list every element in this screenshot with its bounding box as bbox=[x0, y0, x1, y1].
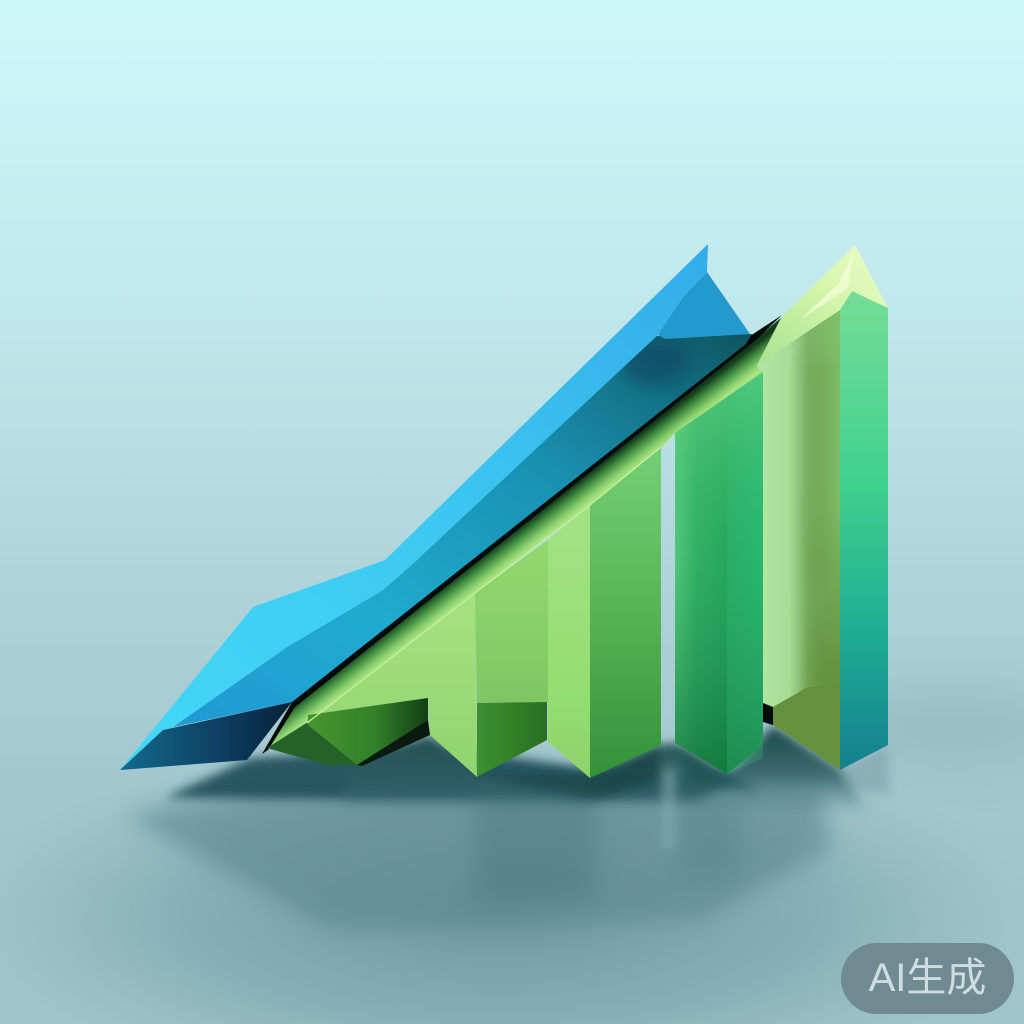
green top band bbox=[267, 317, 782, 749]
bar 4 roof bbox=[757, 245, 888, 365]
notch main facet bbox=[308, 698, 428, 765]
bar 2 light face bbox=[548, 505, 590, 778]
arrow navy underside bbox=[120, 702, 292, 770]
shade under arrow head bbox=[621, 338, 689, 386]
bar 1 front upper bbox=[475, 540, 548, 703]
bars top highlight edge bbox=[307, 447, 661, 723]
floor reflections and shadows bbox=[125, 725, 890, 930]
arrow mid-blue face bbox=[173, 295, 752, 727]
bar 4 right face bbox=[840, 291, 888, 770]
badge: AI生成: AI生成 bbox=[869, 956, 986, 1000]
notch left dark facet bbox=[267, 722, 357, 766]
bar 4 left face bbox=[757, 310, 840, 770]
badge: AI生成 bbox=[841, 943, 1014, 1014]
bar 3 bbox=[675, 372, 763, 774]
black line behind arrow bbox=[262, 315, 782, 754]
bar 2 front face bbox=[590, 447, 661, 778]
blue arrow bbox=[120, 244, 752, 770]
arrow head facet bbox=[658, 272, 750, 339]
bar 1 front lower dark bbox=[477, 702, 547, 777]
arrow top face bbox=[120, 244, 708, 770]
bar 1 light face bbox=[307, 593, 477, 777]
bars bbox=[262, 245, 888, 780]
